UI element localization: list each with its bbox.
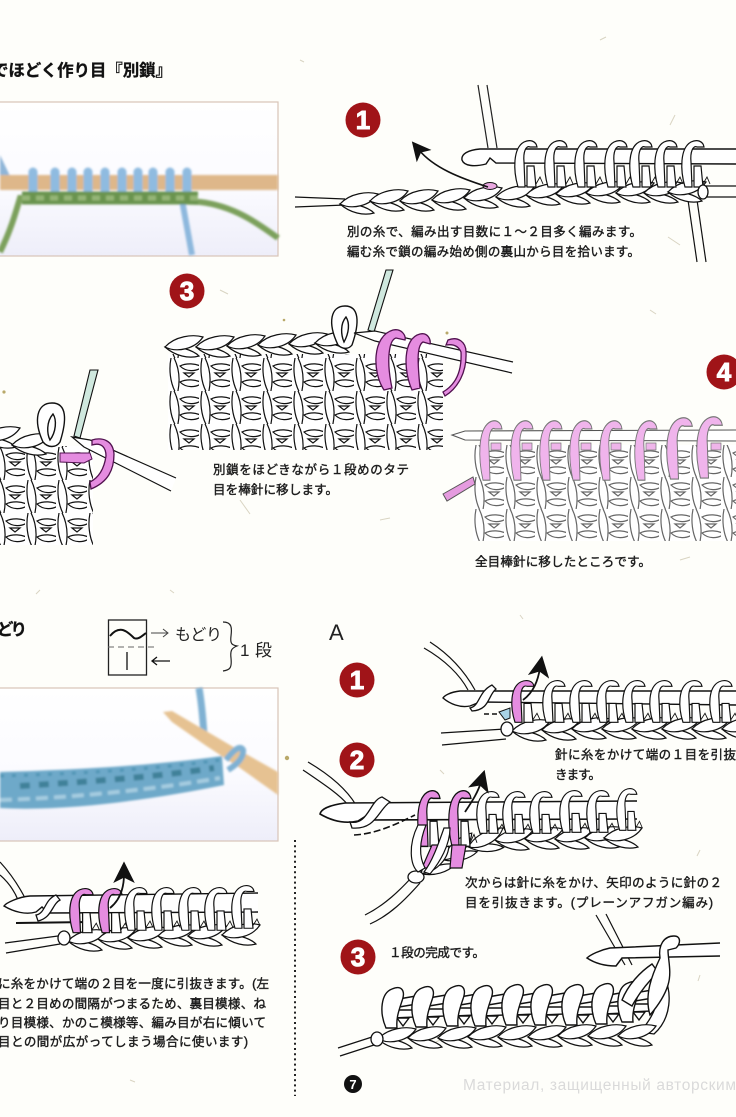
pink stitches (480, 417, 722, 480)
diagram 1: hook picking up chain (295, 85, 736, 262)
caption: decrease note: 目との間が広がってしまう場合に使います) (0, 1034, 248, 1049)
knitting needle (354, 331, 513, 373)
working yarn (303, 762, 356, 805)
chain tail (295, 197, 345, 207)
step badge 1 (346, 102, 380, 138)
twist on hook (350, 797, 390, 828)
caption step 4: 全目棒針に移したところです。 (475, 554, 651, 569)
chain (415, 827, 642, 883)
knitting needle (72, 437, 176, 491)
chain (512, 718, 736, 741)
pink stitch (483, 182, 497, 190)
label A: A (329, 620, 344, 645)
step badge A1: 1 (350, 665, 364, 695)
knot (371, 1032, 383, 1046)
crochet hook (443, 691, 736, 707)
green yarn (74, 370, 98, 438)
caption A1 (555, 747, 736, 782)
stitches on hook (512, 681, 736, 722)
dark yarn line (16, 922, 90, 923)
dashes (354, 815, 415, 835)
knot (408, 871, 424, 883)
dotted divider (294, 840, 296, 1096)
top chain (165, 332, 353, 357)
working yarn (0, 862, 26, 900)
caption A1: きます。 (555, 768, 601, 782)
caption: decrease note: り目模様、かのこ模様等、編み目が右に傾いて (0, 1015, 266, 1030)
caption: decrease note (0, 976, 269, 1049)
caption A2 (465, 875, 722, 910)
knit fabric (473, 445, 736, 541)
working yarn (478, 85, 497, 148)
green yarn (368, 270, 393, 332)
pink bar (60, 453, 92, 463)
right tail and strand (688, 186, 736, 262)
arrow (465, 782, 481, 812)
caption: decrease note: 目と２目めの間隔がつまるため、裏目模様、ね (0, 996, 266, 1011)
step badge A1 (340, 662, 374, 698)
knitting needle (452, 430, 736, 441)
step badge 1: 1 (356, 105, 370, 135)
loop (332, 306, 357, 348)
caption step 1 (347, 224, 642, 259)
tail (441, 729, 506, 745)
crochet hook (587, 943, 720, 966)
diagram A1 (424, 642, 736, 745)
top loops (622, 936, 680, 1015)
page number: 7 (349, 1077, 357, 1092)
tail (5, 936, 60, 953)
photo: hook with blue row (0, 688, 278, 841)
caption step 3 (213, 462, 409, 497)
pink stitch (90, 439, 114, 489)
tail (338, 1037, 374, 1056)
page number (344, 1075, 362, 1093)
caption step 3: 別鎖をほどきながら１段めのタテ (213, 462, 409, 477)
chain (378, 1025, 656, 1049)
working yarn (596, 914, 632, 965)
stitches on hook (70, 886, 260, 933)
end curve (640, 976, 669, 1034)
caption A2: 目を引抜きます。(プレーンアフガン編み) (465, 895, 713, 910)
step badge A3 (340, 940, 376, 974)
crochet hook (320, 801, 637, 822)
dashes and blue stitch (484, 713, 500, 715)
arrow (419, 150, 488, 187)
legend: return stitch symbol (108, 620, 272, 675)
working yarn (424, 642, 475, 690)
caption A1: 針に糸をかけて端の１目を引抜 (555, 747, 736, 762)
stitches on hook (418, 789, 642, 846)
diagram 2: first stitch to needle (0, 370, 176, 545)
stitches on hook (515, 141, 710, 187)
step badge 3 (170, 274, 204, 308)
knot (501, 722, 513, 736)
caption: decrease note: に糸をかけて端の２目を一度に引抜きます。(左 (0, 976, 269, 991)
crochet hook (4, 893, 258, 913)
step badge A2: 2 (350, 745, 364, 775)
diagram 3: moving stitches to needle (165, 270, 513, 450)
twist on hook (36, 895, 60, 921)
knot (58, 931, 70, 945)
caption step 1: 編む糸で鎖の編み始め側の裏山から目を拾います。 (347, 244, 640, 259)
caption A2: 次からは針に糸をかけ、矢印のように針の２ (465, 875, 722, 890)
diagram A2 (303, 762, 642, 924)
step badge A2 (340, 742, 374, 778)
caption step 3: 目を棒針に移します。 (213, 482, 338, 497)
pink stitches (376, 330, 466, 396)
step badge 3: 3 (180, 276, 194, 306)
arrow (110, 874, 124, 908)
legend: return stitch symbol: 1段 (240, 641, 272, 660)
step badge A3: 3 (351, 942, 365, 972)
pink and white lower legs (411, 825, 466, 874)
legend: return stitch symbol: もどり (175, 626, 222, 644)
arrow (523, 668, 540, 700)
diagram A3: completed row (338, 914, 720, 1056)
caption A3: １段の完成です。 (389, 945, 485, 960)
knot (698, 185, 708, 199)
loop (37, 403, 65, 446)
foundation chain (340, 181, 706, 214)
tail (365, 877, 420, 924)
stitches row (382, 982, 653, 1028)
twist on hook (470, 685, 496, 711)
top chain (0, 427, 50, 455)
pink stitch backs (491, 443, 721, 450)
chain (68, 924, 260, 951)
photo: needle with picked-up stitches (0, 102, 278, 256)
diagram 4: all stitches on needle (443, 417, 736, 541)
watermark: Материал, защищенный авторским (463, 1077, 736, 1094)
knit fabric (168, 354, 443, 450)
diagram: decrease at row end (0, 862, 260, 953)
step badge 4: 4 (717, 357, 732, 387)
knit fabric (0, 446, 93, 545)
pink tail (443, 477, 475, 501)
crochet hook (462, 149, 736, 166)
caption step 1: 別の糸で、編み出す目数に１〜２目多く編みます。 (347, 224, 642, 239)
step badge 4 (706, 354, 736, 390)
